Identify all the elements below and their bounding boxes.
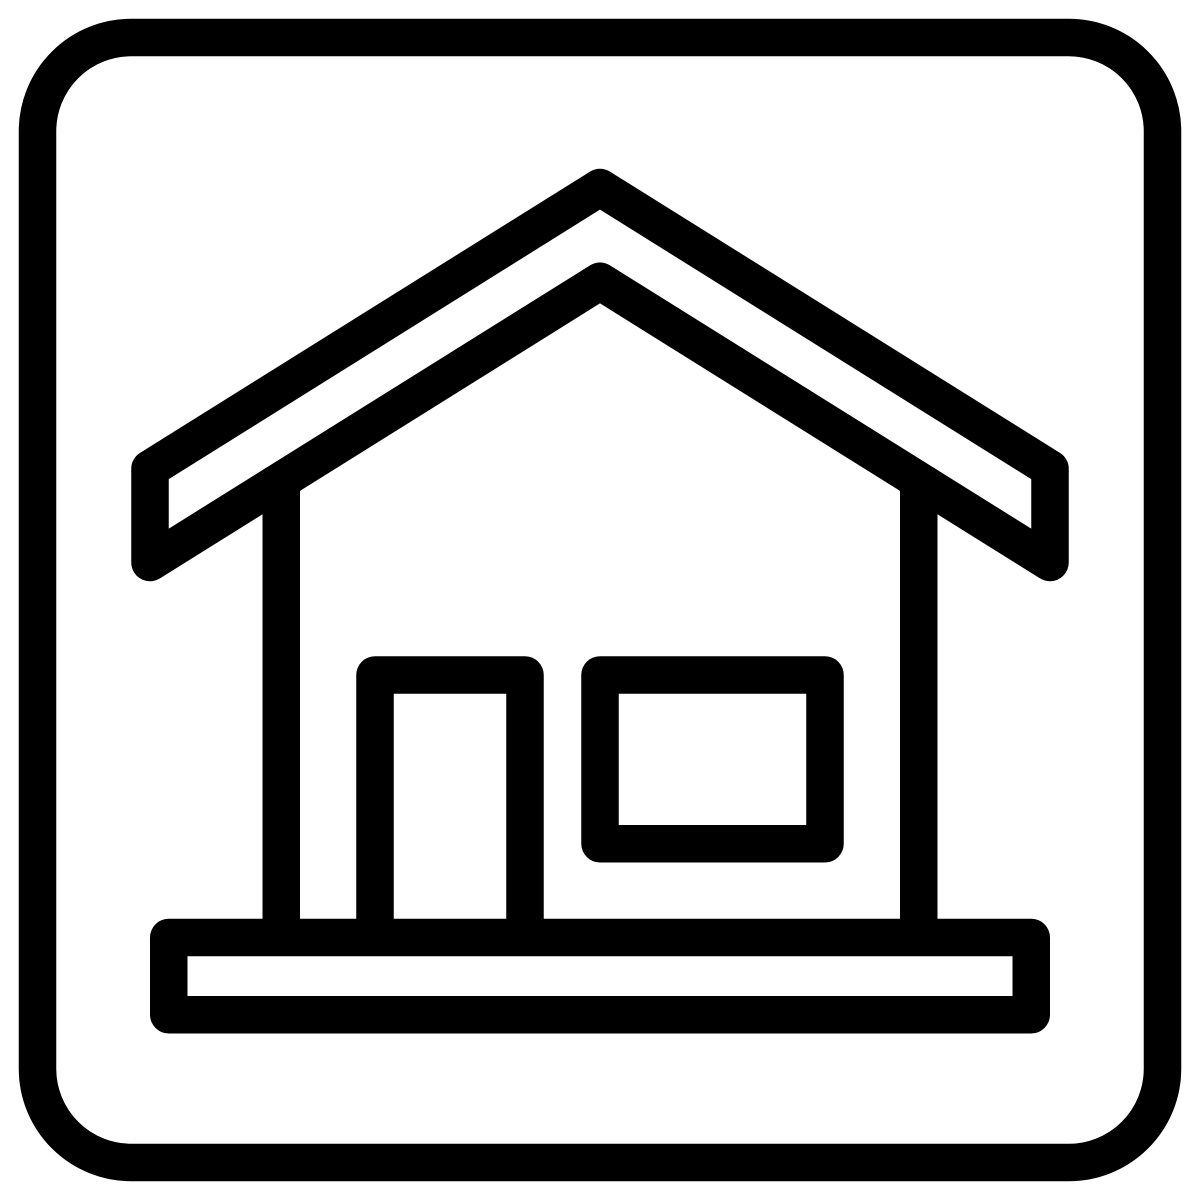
left wall — [262, 478, 300, 938]
floor base — [169, 938, 1031, 1015]
door — [375, 675, 525, 938]
window — [600, 675, 825, 844]
roof — [150, 188, 1050, 562]
right wall — [900, 478, 938, 938]
